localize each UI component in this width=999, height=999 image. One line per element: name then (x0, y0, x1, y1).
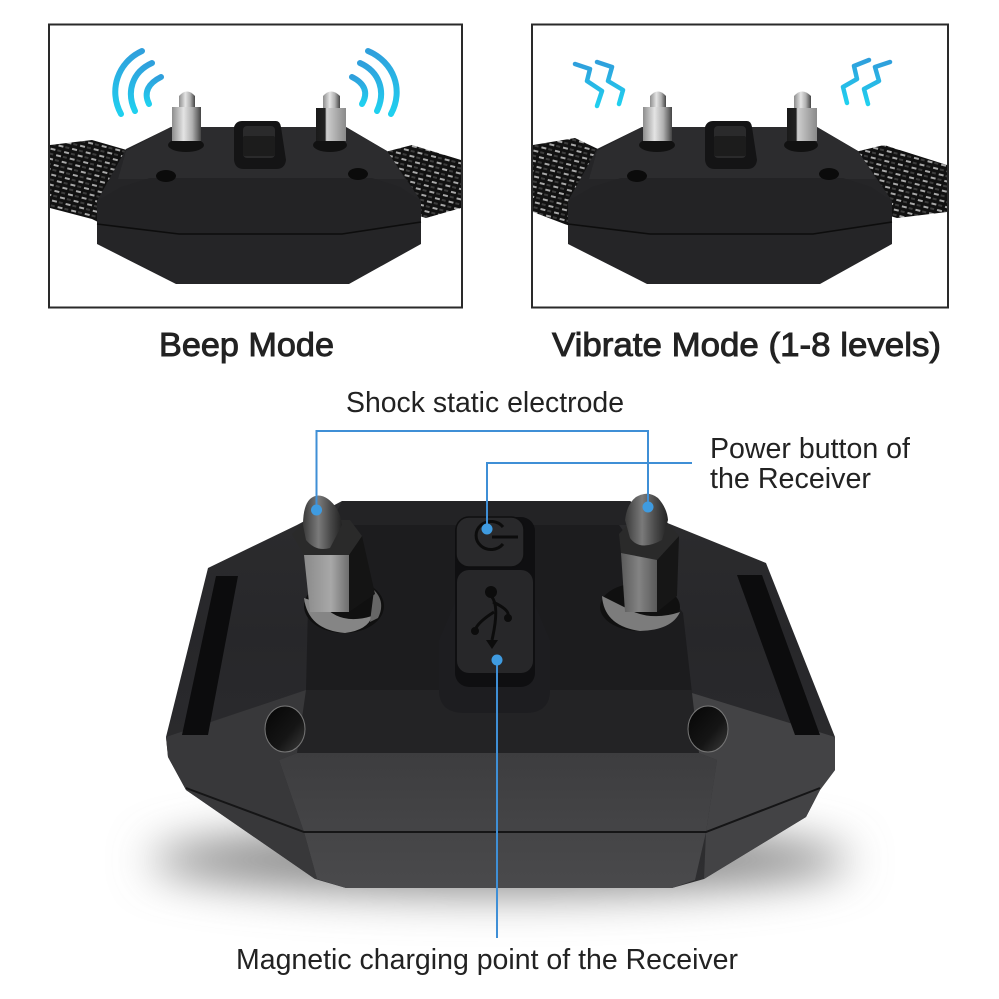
heading: vibrate mode: Vibrate Mode (1-8 levels) (552, 326, 941, 363)
icon: usb symbol (471, 586, 512, 649)
icon: left sound waves (115, 51, 161, 114)
lower top face (297, 690, 699, 753)
photo: collar in beep mode (97, 92, 421, 284)
photo: collar in vibrate mode (568, 92, 892, 284)
callout line: power button (482, 463, 692, 534)
left strap (50, 140, 130, 228)
parting line (186, 788, 820, 832)
receiver device (166, 494, 835, 888)
left strap slot (182, 576, 238, 735)
panel: vibrate mode (532, 24, 948, 308)
left electrode (292, 496, 384, 633)
left bevel facet (166, 690, 317, 879)
label: shock static electrode: Shock static electrode (346, 387, 624, 419)
callout line: shock static electrode (311, 431, 654, 516)
right bevel facet (692, 693, 835, 879)
heading: beep mode: Beep Mode (159, 326, 334, 363)
icon: right vibration zigzags (843, 60, 890, 104)
left strap (533, 138, 600, 228)
icon: power symbol (476, 521, 518, 550)
left screw hole (265, 706, 305, 752)
right strap (855, 145, 947, 218)
icon: left vibration zigzags (575, 62, 623, 106)
icon: right sound waves (352, 51, 397, 114)
device shell (166, 501, 835, 888)
right electrode (600, 494, 680, 631)
panel: beep mode (49, 24, 462, 308)
right screw hole (688, 706, 728, 752)
label: power button of the receiver: Power button of (710, 433, 911, 465)
button pad (439, 517, 550, 713)
top band (330, 501, 660, 525)
ground shadow (150, 826, 850, 894)
recessed top face (297, 525, 699, 753)
right strap slot (737, 575, 820, 735)
label: magnetic charging point: Magnetic charging point of the Receiver (236, 944, 738, 976)
front face (279, 753, 717, 888)
label: power button of the receiver: the Receiver (710, 463, 871, 495)
right strap (385, 145, 461, 218)
callout line: magnetic charging point (492, 654, 502, 938)
